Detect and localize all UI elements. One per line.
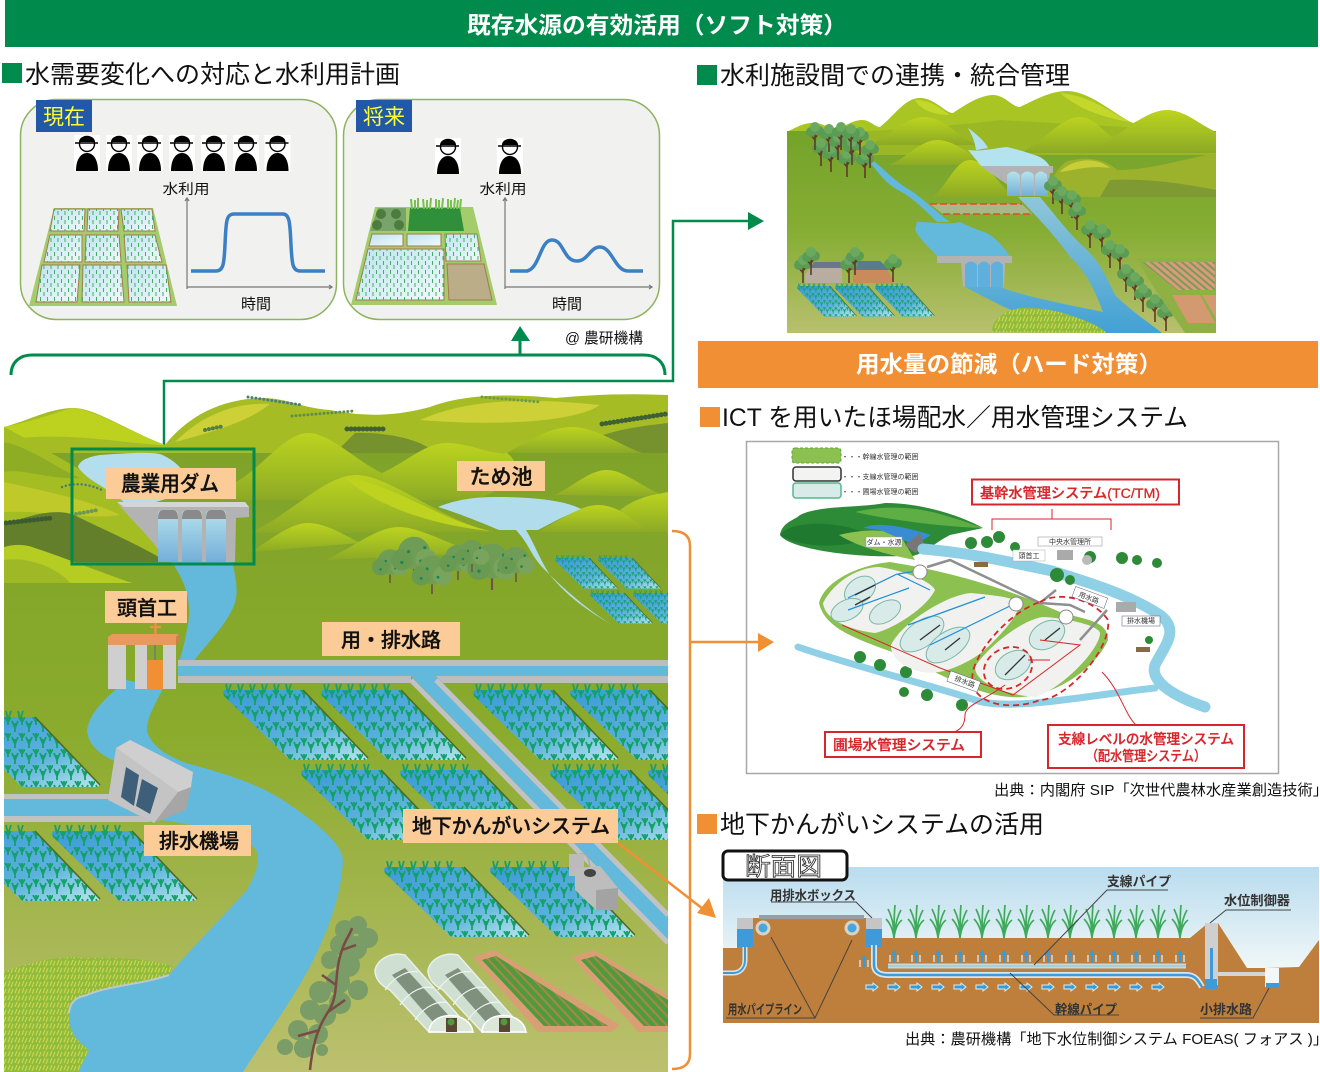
connector arrow: dam to coordinated facilities: [164, 212, 764, 448]
river: [69, 560, 343, 1072]
label: agricultural dam: [106, 468, 236, 499]
illustration: water facilities coordination: [787, 91, 1216, 333]
chart: varied water use: 時間: [552, 296, 582, 313]
trees: [806, 122, 1175, 331]
legend: [792, 448, 918, 498]
facility labels: [947, 537, 1160, 692]
ground: [787, 131, 1216, 333]
heading: coordination between facilities: 水利施設間での連携・統合管理: [720, 62, 1070, 90]
source: SIP: 出典：内閣府 SIP「次世代農林水産業創造技術」: [994, 782, 1320, 799]
part labels: [728, 874, 1290, 1017]
label: agricultural dam: 農業用ダム: [121, 473, 219, 496]
part labels: 幹線パイプ: [1055, 1002, 1117, 1017]
label: drainage pump station: 排水機場: [159, 830, 239, 853]
grass patch: [4, 957, 173, 1072]
mountains and dam: ダム・水源: [866, 538, 902, 546]
part labels: 用排水ボックス: [770, 888, 856, 903]
chart: constant water use: 水利用: [162, 181, 210, 197]
callout: trunk water management: [972, 480, 1179, 530]
diagram: ICT water management system: [746, 442, 1278, 774]
source: NARO FOEAS: 出典：農研機構「地下水位制御システム FOEAS( フォアス )」: [905, 1031, 1320, 1048]
grass: [992, 308, 1107, 333]
river: [965, 197, 1162, 333]
icons: two farmers: [435, 138, 523, 174]
fields: diversified crops: [351, 198, 497, 305]
distant tree clusters: [205, 397, 666, 430]
heading: ICT water management: ICT を用いたほ場配水／用水管理システム: [722, 404, 1188, 432]
red dashed zone: [930, 204, 1032, 214]
panel: future: [344, 100, 660, 320]
callout: trunk water management: 基幹水管理システム(TC/TM): [980, 485, 1160, 501]
left hills: [4, 427, 167, 583]
facility labels: 中央水管理所: [1049, 537, 1091, 546]
mountains and dam: [780, 503, 983, 560]
callout: field water management: [825, 685, 1005, 757]
pump station: [108, 740, 193, 823]
facility labels: 用水路: [1077, 590, 1100, 605]
label: subsurface irrigation: 地下かんがいシステム: [412, 815, 610, 838]
field area: [819, 560, 1108, 697]
label: drainage pump station: [144, 825, 251, 856]
dam reservoir: [78, 452, 180, 502]
legend: ・・・幹線水管理の範囲: [842, 452, 918, 461]
far hills: [4, 394, 668, 453]
banner: soft measures: [5, 0, 1318, 47]
badge: current: [36, 100, 92, 132]
water boxes: [737, 918, 882, 947]
branch canal: [411, 676, 668, 943]
part labels: 支線パイプ: [1107, 874, 1171, 889]
icons: seven farmers: [74, 135, 290, 171]
ground: [4, 453, 668, 1072]
reservoir inlet stream: [968, 128, 988, 150]
part labels: 水位制御器: [1224, 893, 1290, 908]
label: headworks: [105, 591, 187, 623]
subsurface irrigation device: [569, 854, 618, 910]
facility labels: 排水路: [953, 674, 976, 689]
diagram: cross-section of subsurface irrigation: [723, 851, 1319, 1023]
left drainage canal: [4, 794, 150, 822]
label: reservoir pond: ため池: [470, 466, 532, 489]
paddy grid: [0, 684, 793, 937]
chart: varied water use: 水利用: [480, 181, 526, 197]
credit: NARO: @ 農研機構: [565, 330, 643, 347]
badge: cross section: [723, 851, 847, 881]
fields: uniform paddies: [29, 208, 177, 306]
red dashed boundaries: [972, 597, 1108, 705]
middle hills: [220, 427, 668, 560]
heading: water demand change and plan: 水需要変化への対応と水利用計画: [25, 61, 400, 89]
upper reservoir: [968, 147, 1050, 167]
bracket with up arrow: [11, 326, 665, 375]
leader lines: [726, 890, 1291, 1018]
farmhouses: [794, 247, 902, 283]
legend: ・・・支線水管理の範囲: [842, 472, 918, 481]
soil profile: [723, 918, 1319, 1023]
right fields: [1137, 258, 1216, 333]
greenhouse two: [428, 954, 526, 1032]
headworks: [108, 622, 179, 689]
greenhouses: [375, 954, 526, 1032]
left tree clusters: [6, 484, 104, 523]
right arrows: [860, 955, 1164, 991]
callout: lateral level water management: [1048, 672, 1244, 768]
heading: subsurface irrigation use: 地下かんがいシステムの活用: [720, 811, 1044, 839]
badge: current: 現在: [43, 106, 85, 129]
vegetable fields: [473, 950, 668, 1032]
greenhouse one: [375, 954, 473, 1032]
up arrows: [890, 950, 1184, 963]
banner: hard measures: 用水量の節減（ハード対策）: [856, 351, 1162, 377]
left stream and lower reservoir: [868, 160, 1010, 257]
upper dam: [980, 166, 1053, 196]
facility labels: 頭首工: [1018, 551, 1040, 560]
water level controller: [1205, 923, 1279, 989]
label: headworks: 頭首工: [117, 597, 177, 620]
pond and stream: [438, 497, 614, 626]
orange bracket and arrows: [618, 531, 774, 1069]
banner: hard measures: [698, 341, 1318, 388]
illustration: main landscape: [4, 394, 668, 1072]
panel: current: [20, 100, 336, 320]
paddies: [797, 283, 934, 317]
badge: future: [356, 100, 412, 132]
trees: [854, 531, 1162, 711]
label: irrigation and drainage canals: [322, 622, 460, 656]
badge: cross section: 断面図: [745, 853, 822, 881]
tall tree: [277, 916, 378, 1070]
label: reservoir pond: [457, 461, 545, 491]
pipes: [723, 945, 1202, 987]
chart: varied water use: [480, 181, 652, 313]
callout: lateral level water management: （配水管理システム）: [1086, 748, 1206, 764]
badge: future: 将来: [363, 106, 405, 129]
part labels: 小排水路: [1200, 1002, 1252, 1017]
label: subsurface irrigation: [403, 809, 618, 843]
callout: field water management: 圃場水管理システム: [833, 737, 965, 753]
callout: lateral level water management: 支線レベルの水管理システム: [1058, 731, 1234, 747]
upper paddies: [555, 555, 668, 624]
main canal: [178, 660, 668, 683]
facility labels: 排水機場: [1127, 616, 1155, 625]
river system: [798, 549, 1205, 707]
dam highlight box: [72, 449, 254, 564]
orchard trees: [372, 537, 535, 594]
part labels: 用水パイプライン: [728, 1002, 802, 1017]
chart: constant water use: 時間: [241, 296, 271, 313]
legend: ・・・圃場水管理の範囲: [842, 487, 918, 496]
rice plants: [886, 905, 1188, 938]
label: irrigation and drainage canals: 用・排水路: [341, 629, 441, 652]
agricultural dam: [117, 502, 249, 562]
banner: soft measures: 既存水源の有効活用（ソフト対策）: [467, 12, 847, 38]
chart: constant water use: [162, 181, 332, 313]
lower dam: [937, 256, 1012, 287]
hills: [789, 91, 1214, 131]
